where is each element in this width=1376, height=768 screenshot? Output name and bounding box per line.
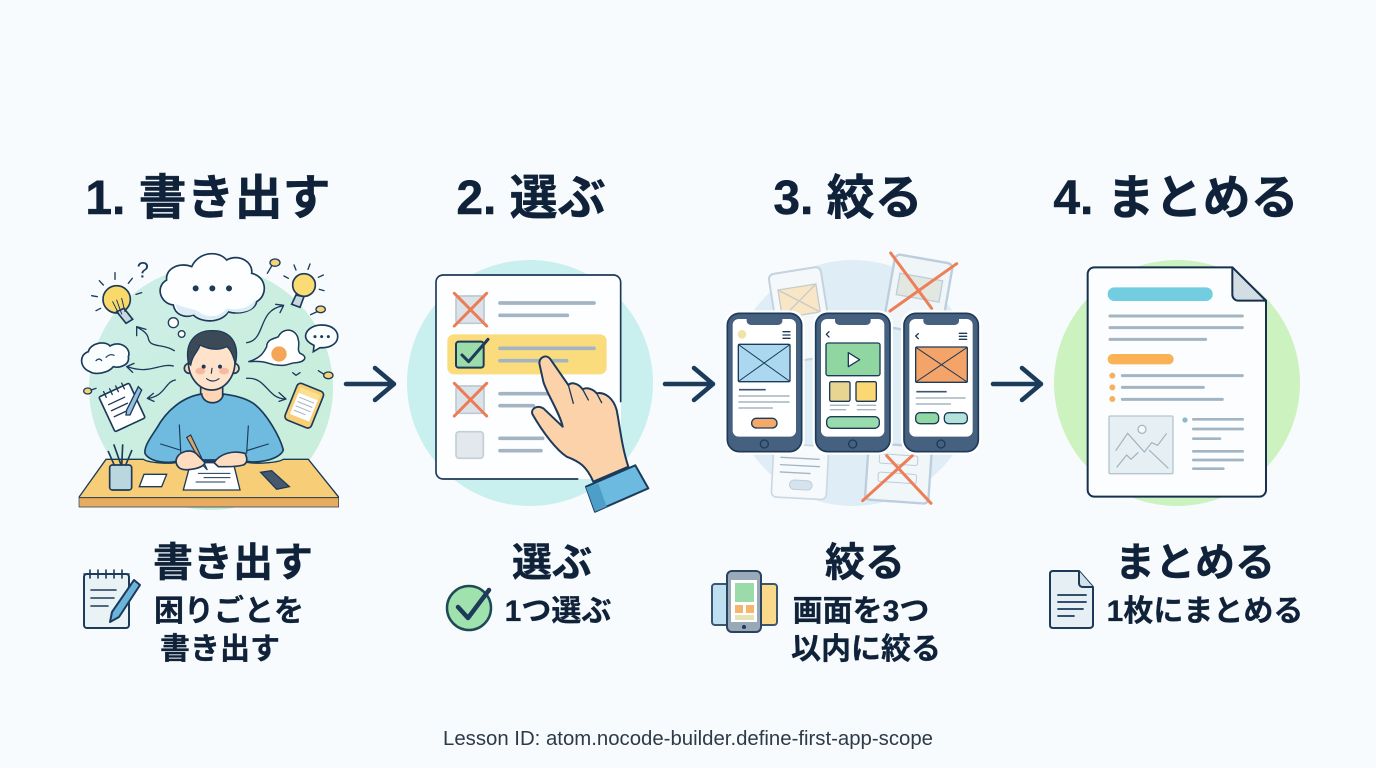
description: 書き出す xyxy=(160,633,280,666)
pointing hand xyxy=(532,356,628,482)
smartphone right xyxy=(284,382,325,429)
icon: document xyxy=(1050,571,1093,628)
thought cloud xyxy=(160,254,264,337)
description: 画面を3つ xyxy=(793,595,929,628)
title: まとめる xyxy=(1115,541,1275,585)
title: 書き出す xyxy=(153,541,313,585)
illustration: person writing down problems xyxy=(79,254,338,510)
light bulb right xyxy=(284,264,324,307)
icon: check circle xyxy=(447,586,491,630)
item 2 checked xyxy=(456,339,594,368)
item 3 rejected xyxy=(454,383,550,416)
background circle xyxy=(1054,260,1300,506)
icon: phones xyxy=(712,571,777,632)
caption block 4 xyxy=(1050,541,1303,628)
background circle xyxy=(89,266,333,510)
description xyxy=(791,595,941,666)
hands and pen xyxy=(176,435,247,470)
notebook and pen xyxy=(98,380,145,432)
checklist card xyxy=(436,275,621,479)
illustration: choosing one checklist item xyxy=(407,260,653,512)
icon: notepad and pen xyxy=(84,570,140,628)
phone 2 xyxy=(813,310,893,455)
title: 選ぶ xyxy=(512,541,592,585)
side text xyxy=(1182,417,1243,469)
curved thought arrows xyxy=(127,304,286,401)
arrow 2 to 3 xyxy=(665,368,713,400)
description: 1つ選ぶ xyxy=(505,595,611,628)
title: 絞る xyxy=(825,541,905,585)
arrow 3 to 4 xyxy=(993,368,1041,400)
arrow 1 to 2 xyxy=(346,368,394,400)
caption block 1 xyxy=(84,541,313,666)
heading: step 1: 1. 書き出す xyxy=(85,172,331,225)
description: 1枚にまとめる xyxy=(1107,595,1303,628)
image placeholder xyxy=(1109,416,1173,474)
description: 以内に絞る xyxy=(791,633,941,666)
heading: step 2: 2. 選ぶ xyxy=(456,172,606,225)
background circle xyxy=(407,260,653,506)
title bar xyxy=(1108,287,1213,301)
heading: step 3: 3. 絞る xyxy=(773,172,923,225)
phone 3 xyxy=(901,310,981,455)
phone 1 xyxy=(724,310,805,455)
pencil cup xyxy=(108,445,132,490)
illustration: narrowing to three screens xyxy=(724,253,981,506)
description: 困りごとを xyxy=(154,594,304,628)
description xyxy=(154,594,304,666)
heading: step 4: 4. まとめる xyxy=(1053,172,1299,225)
document page xyxy=(1088,267,1266,497)
shirt cuff xyxy=(586,465,648,512)
paper on desk xyxy=(183,463,240,490)
question mark: ? xyxy=(137,257,149,282)
section bar xyxy=(1108,354,1174,364)
desk xyxy=(79,459,338,507)
selected row highlight xyxy=(447,334,607,374)
illustration: one-page summary document xyxy=(1054,260,1300,506)
small idea drops xyxy=(84,259,333,394)
discarded wireframes behind phones xyxy=(768,254,953,504)
small cloud left xyxy=(82,343,129,373)
orange cloud xyxy=(248,330,305,365)
eraser block xyxy=(139,474,167,487)
bullet list xyxy=(1109,373,1242,402)
light bulb left xyxy=(92,273,142,323)
footer lesson id: Lesson ID: atom.nocode-builder.define-first-app-scope xyxy=(443,728,933,750)
caption block 2 xyxy=(447,541,611,630)
intro text lines xyxy=(1110,316,1242,339)
person xyxy=(145,331,283,462)
item 1 rejected xyxy=(454,293,594,326)
phone on desk xyxy=(261,471,289,489)
speech bubble xyxy=(306,325,338,352)
background circle xyxy=(730,260,976,506)
item 4 empty xyxy=(456,432,543,458)
red crosses xyxy=(863,253,957,503)
caption block 3 xyxy=(712,541,941,666)
